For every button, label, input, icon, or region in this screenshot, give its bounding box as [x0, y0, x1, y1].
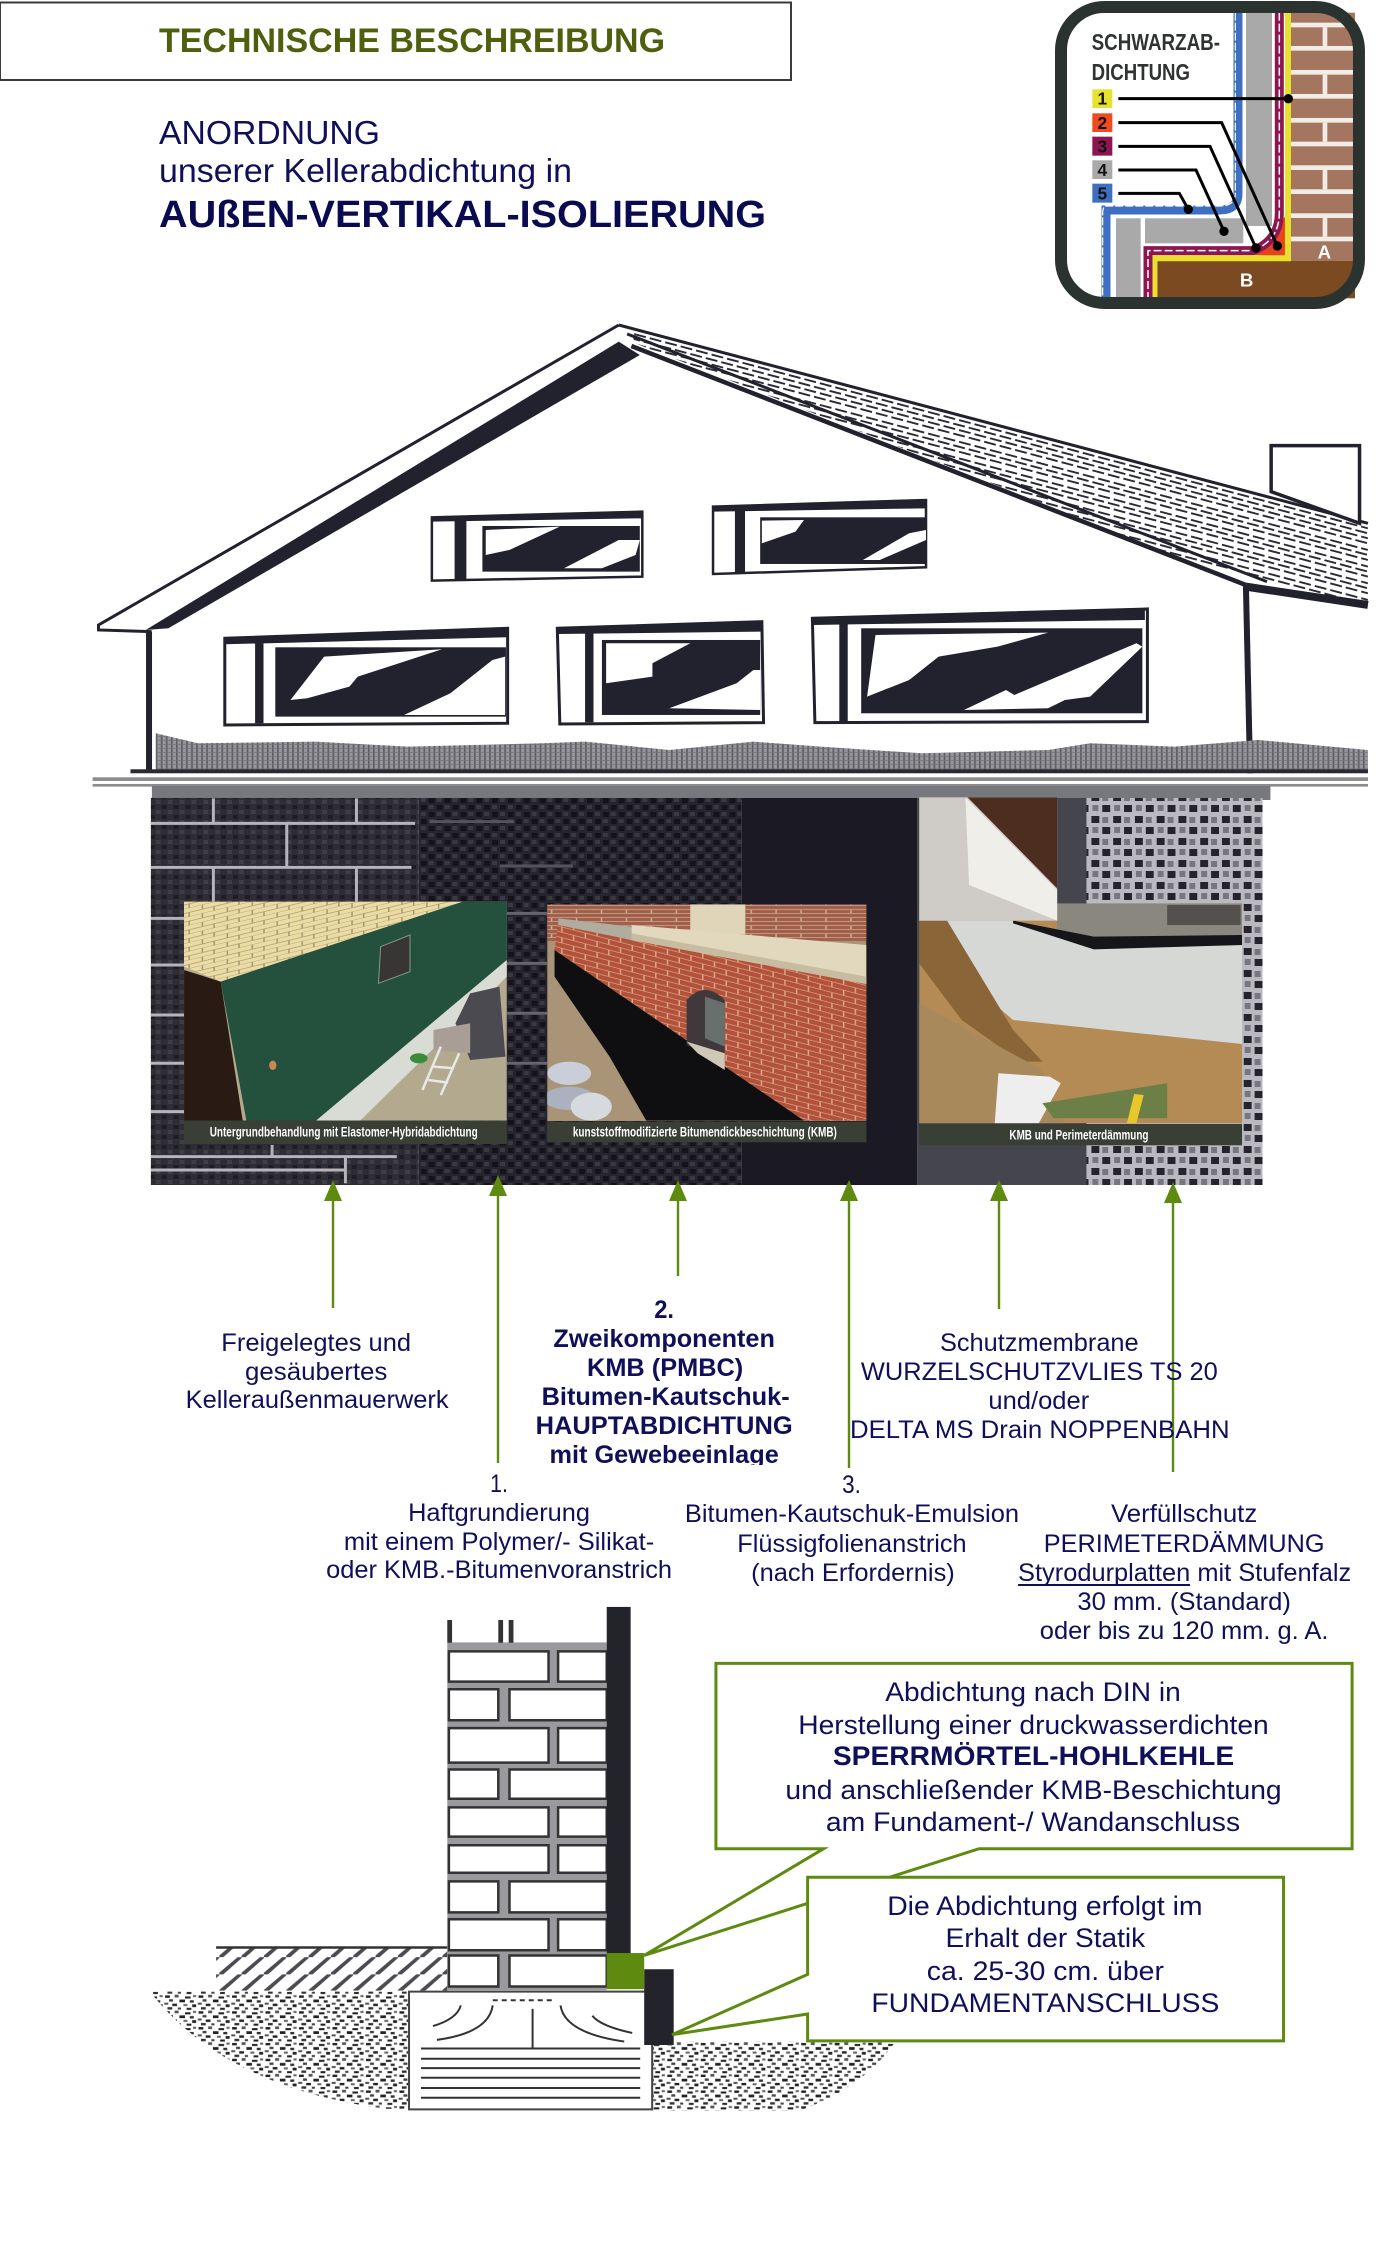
text: backfill protection: Verfüllschutz [1111, 1501, 1257, 1528]
arrow: primer [489, 1175, 507, 1463]
photos group [151, 797, 1242, 1183]
text: step 2 main seal [536, 1297, 793, 1469]
brick mortar lines on panel [151, 798, 573, 1183]
window top-left [432, 511, 642, 581]
text: step 3 emulsion: (nach Erfordernis) [751, 1560, 955, 1587]
text: step 1 primer: oder KMB.-Bitumenvoranstrich [326, 1557, 672, 1584]
text: step 3 emulsion: Flüssigfolienanstrich [737, 1531, 967, 1558]
photo 1: green sealed wall: Untergrundbehandlung mit Elastomer-Hybridabdichtung [210, 1125, 478, 1140]
text: step 1 primer [326, 1471, 672, 1584]
window bottom-right [812, 608, 1147, 723]
arrow: main seal [669, 1180, 687, 1276]
subtitle text block: AUßEN-VERTIKAL-ISOLIERUNG [159, 194, 766, 236]
callout text: foundation connection: Die Abdichtung erfolgt im [887, 1891, 1203, 1921]
text: backfill protection: 30 mm. (Standard) [1077, 1589, 1291, 1616]
badge heading: DICHTUNG [1092, 59, 1190, 85]
ground shrubs strip [156, 733, 1368, 770]
legend squares: 2 [1098, 113, 1107, 133]
house walls [149, 585, 1250, 773]
legend squares: 4 [1098, 160, 1108, 180]
title: Technische Beschreibung: TECHNISCHE BESCHREIBUNG [159, 22, 665, 60]
photo 3: perimeter insulation [919, 903, 1242, 1145]
text: backfill protection: Styrodurplatten mit Stufenfalz [1018, 1560, 1351, 1587]
window top-right [713, 499, 926, 574]
text: exposed masonry [186, 1330, 449, 1414]
photo 1: green sealed wall [184, 902, 507, 1144]
chimney [1271, 446, 1360, 523]
badge: Schwarzabdichtung layer diagram: B [1240, 270, 1253, 291]
legend squares: 5 [1098, 183, 1108, 203]
callout text: din sealing: Herstellung einer druckwasserdichten [798, 1710, 1269, 1740]
text: step 1 primer: Haftgrundierung [408, 1500, 590, 1527]
house drawing [93, 325, 1368, 787]
text: step 2 main seal: HAUPTABDICHTUNG [536, 1413, 793, 1440]
text: step 1 primer: 1. [490, 1471, 508, 1498]
callout text: din sealing [785, 1677, 1282, 1837]
badge: Schwarzabdichtung layer diagram: A [1318, 241, 1331, 262]
text: backfill protection [1018, 1501, 1351, 1645]
callout text: foundation connection: Erhalt der Statik [946, 1923, 1146, 1953]
subtitle text block [159, 114, 766, 236]
arrow: membrane [990, 1180, 1008, 1309]
callout text: din sealing: am Fundament-/ Wandanschluss [826, 1807, 1240, 1837]
text: backfill protection: oder bis zu 120 mm. g. A. [1040, 1618, 1328, 1645]
text: step 1 primer: mit einem Polymer/- Silikat- [344, 1529, 654, 1556]
callout text: din sealing: Abdichtung nach DIN in [885, 1677, 1181, 1707]
legend squares: 1 [1098, 89, 1108, 109]
callout text: din sealing: SPERRMÖRTEL-HOHLKEHLE [833, 1741, 1234, 1771]
leader lines [1118, 99, 1288, 248]
callout text: foundation connection: ca. 25-30 cm. über [927, 1956, 1164, 1986]
foundation sealing block [644, 1969, 674, 2045]
caption 2 [547, 1122, 866, 1142]
green joint marker [607, 1953, 644, 1989]
arrow: masonry [324, 1180, 342, 1308]
sealing column [607, 1607, 631, 1954]
callout text: foundation connection: FUNDAMENTANSCHLUSS [871, 1988, 1219, 2018]
legend squares [1092, 89, 1112, 203]
text: protective membrane: DELTA MS Drain NOPPENBAHN [850, 1417, 1230, 1444]
foundation block [409, 1992, 652, 2109]
text: protective membrane: Schutzmembrane [940, 1330, 1139, 1357]
badge heading [1092, 29, 1220, 85]
callout text: din sealing: und anschließender KMB-Beschichtung [785, 1775, 1282, 1805]
photo 2: red brick with KMB coating [544, 904, 866, 1142]
photo 2: red brick with KMB coating: kunststoffmodifizierte Bitumendickbeschichtung (KMB) [573, 1125, 837, 1140]
ground speckle right [652, 2042, 895, 2110]
text: step 2 main seal: Bitumen-Kautschuk- [542, 1384, 790, 1411]
badge heading: SCHWARZAB- [1092, 29, 1220, 55]
text: protective membrane [850, 1330, 1230, 1444]
text: protective membrane: und/oder [988, 1388, 1089, 1415]
roof outline [99, 325, 1368, 632]
brick wall [447, 1620, 607, 1990]
roof tiles [619, 330, 1368, 605]
text: exposed masonry: gesäubertes [245, 1359, 387, 1386]
text: exposed masonry: Freigelegtes und [221, 1330, 411, 1357]
text: step 2 main seal: 2. [654, 1297, 674, 1324]
text: step 2 main seal: mit Gewebeeinlage [549, 1442, 779, 1469]
foundation wall cross-section [150, 1607, 1352, 2110]
callout: din sealing [644, 1663, 1352, 1955]
badge: Schwarzabdichtung layer diagram [1061, 7, 1359, 303]
photo 3: perimeter insulation: KMB und Perimeterdämmung [1009, 1127, 1148, 1142]
caption 3 [919, 1124, 1242, 1145]
text: backfill protection: PERIMETERDÄMMUNG [1044, 1530, 1324, 1558]
callout: foundation connection [672, 1877, 1284, 2041]
inset photo: insulation detail [919, 797, 1057, 921]
caption 1 [184, 1121, 507, 1144]
text: step 3 emulsion [685, 1472, 1019, 1587]
subtitle text block: unserer Kellerabdichtung in [159, 152, 572, 189]
legend squares: 3 [1098, 136, 1108, 156]
text: protective membrane: WURZELSCHUTZVLIES TS 20 [861, 1359, 1218, 1386]
callout text: foundation connection [871, 1891, 1219, 2018]
backfill hatch [216, 1948, 447, 1991]
text: step 3 emulsion: Bitumen-Kautschuk-Emulsion [685, 1501, 1019, 1528]
arrow: emulsion [840, 1180, 858, 1468]
arrow: perimeter insulation [1164, 1182, 1182, 1472]
photo panel background [151, 786, 1270, 1185]
text: step 3 emulsion: 3. [842, 1472, 861, 1499]
text: exposed masonry: Kelleraußenmauerwerk [186, 1387, 449, 1414]
window bottom-left [225, 628, 508, 725]
text: step 2 main seal: KMB (PMBC) [587, 1355, 743, 1382]
ground speckle left [150, 1992, 409, 2109]
subtitle text block: ANORDNUNG [159, 114, 380, 151]
window bottom-middle [557, 622, 764, 724]
title box [0, 2, 791, 80]
text: step 2 main seal: Zweikomponenten [553, 1326, 775, 1353]
